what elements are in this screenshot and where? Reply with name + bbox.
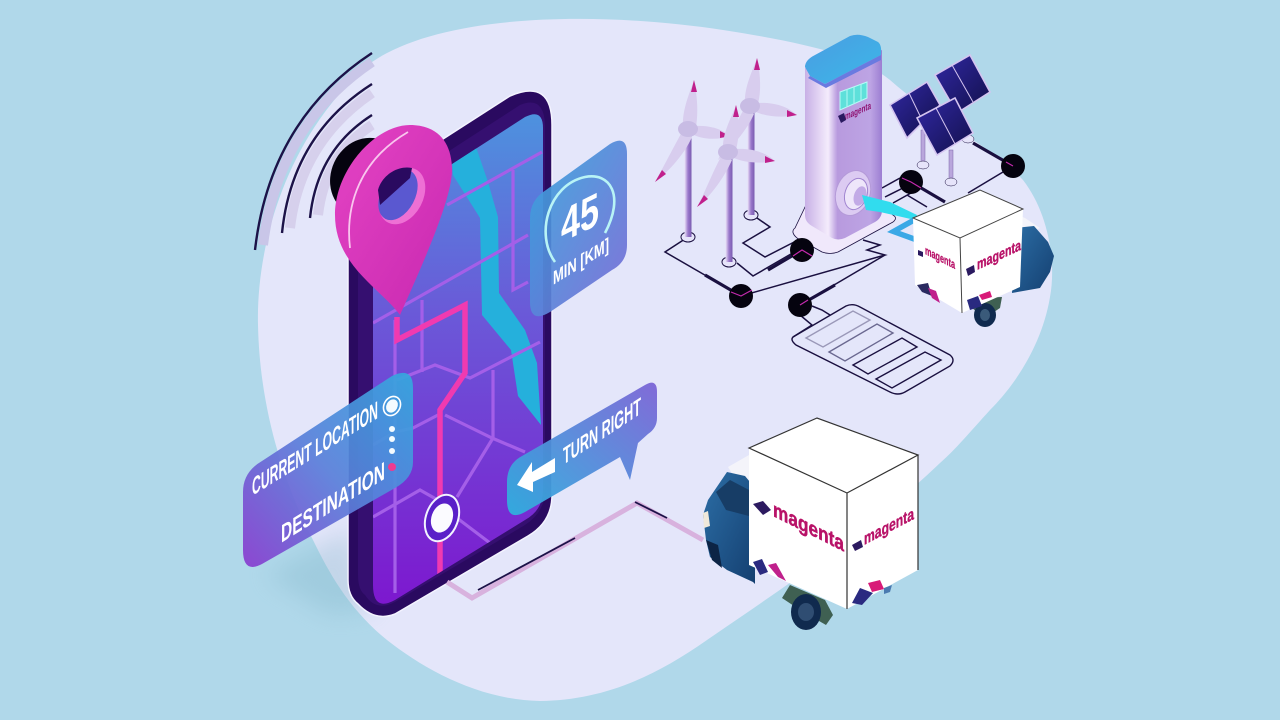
background blob <box>258 19 1052 701</box>
small delivery truck <box>913 190 1054 327</box>
unit label: MIN [KM] <box>553 234 609 290</box>
small truck logo right: magenta <box>977 237 1021 274</box>
large truck wheel <box>782 585 833 630</box>
value 45: 45 <box>561 182 599 253</box>
gauge arc <box>546 176 614 262</box>
large truck logo left: magenta <box>773 497 844 556</box>
panel A <box>890 82 940 138</box>
river <box>452 147 541 425</box>
phone screen <box>373 114 543 604</box>
charging station <box>793 35 918 253</box>
phone body <box>348 91 552 616</box>
panel B <box>935 55 990 113</box>
route <box>397 305 465 575</box>
charge zigzag <box>887 218 918 243</box>
large truck box <box>749 418 918 609</box>
speaker circle behind pin <box>317 126 415 228</box>
destination label: DESTINATION <box>281 456 385 548</box>
socket <box>830 166 876 220</box>
large truck logo marks <box>753 501 863 551</box>
body <box>805 50 882 240</box>
battery outline <box>792 305 953 394</box>
solar panels <box>890 55 990 186</box>
charge display <box>840 82 867 110</box>
battery cells <box>806 311 941 388</box>
streets <box>373 152 542 593</box>
charge beam <box>862 195 917 220</box>
signal waves <box>255 53 372 250</box>
panel: current location and destination: CURRENT LOCATION <box>252 395 378 501</box>
phone and panel shadow <box>265 530 375 615</box>
map <box>373 147 542 593</box>
panel: turn right <box>507 383 657 515</box>
route dots <box>380 393 404 471</box>
small truck solar tiles <box>917 283 992 310</box>
station logo mark <box>838 113 846 123</box>
panel: 45 min km <box>530 141 627 316</box>
left arrow <box>517 458 555 492</box>
small truck logo left: magenta <box>925 243 956 272</box>
base <box>793 205 896 254</box>
turbine 2 <box>697 105 775 267</box>
large truck logo right: magenta <box>864 504 915 549</box>
large truck solar tiles <box>753 559 892 605</box>
small truck cab <box>1012 214 1054 293</box>
turn right label: TURN RIGHT <box>563 392 641 470</box>
current position marker <box>419 490 465 546</box>
panel C <box>917 98 973 155</box>
smartphone <box>348 91 552 616</box>
cap <box>805 35 881 84</box>
panel: current location and destination <box>243 373 413 567</box>
node dots <box>729 154 1025 317</box>
turbine 1 <box>655 80 730 242</box>
wind turbines <box>655 58 797 267</box>
large truck cab <box>703 455 755 584</box>
wiring network <box>665 143 1013 337</box>
map pin <box>335 125 452 315</box>
poles <box>917 130 974 186</box>
small truck box <box>913 190 1023 313</box>
turbine 3 <box>718 58 797 220</box>
small truck wheel <box>968 297 1002 327</box>
station logo text: magenta <box>845 101 871 123</box>
route wire to truck <box>447 502 703 598</box>
large delivery truck <box>703 418 918 630</box>
small truck logo marks <box>918 250 975 276</box>
